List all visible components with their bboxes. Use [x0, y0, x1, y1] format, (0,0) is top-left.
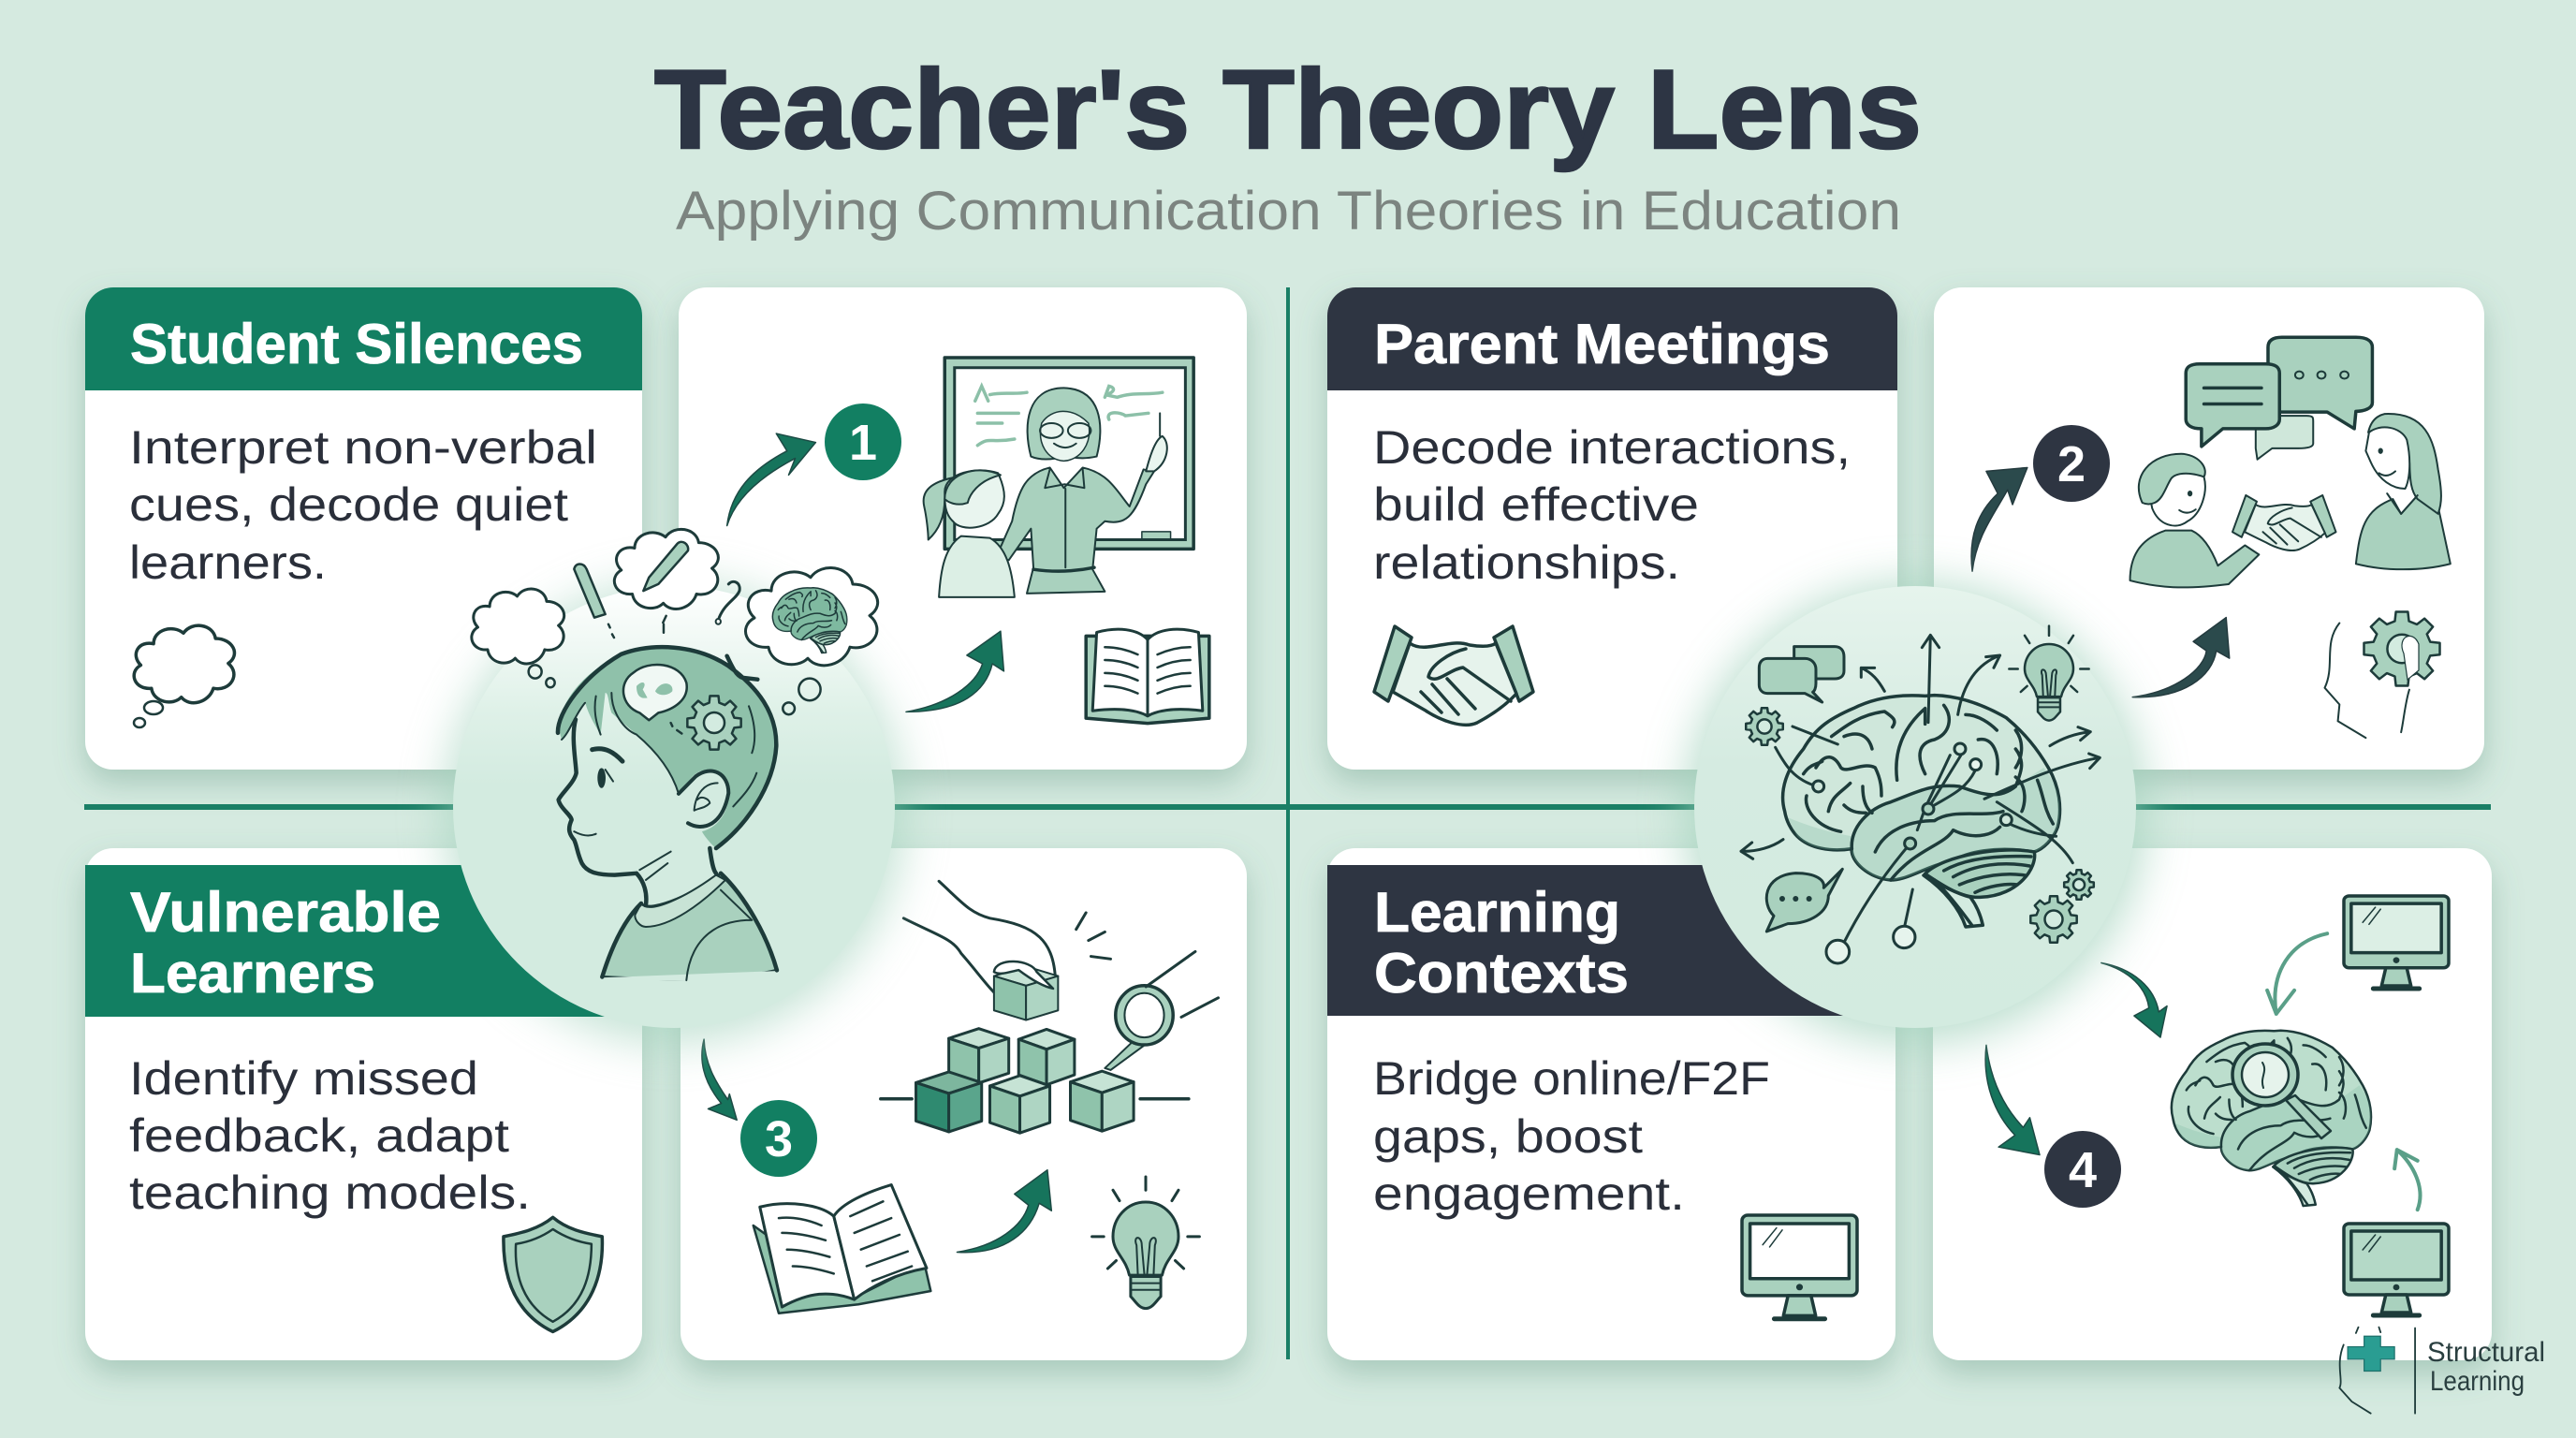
icon: shield	[504, 1217, 602, 1331]
icon: open book	[754, 1185, 930, 1313]
subtitle: Applying Communication Theories in Education	[676, 181, 1901, 242]
gear on hair	[687, 696, 741, 750]
central brain	[1783, 696, 2060, 927]
arrow up right lower	[2132, 618, 2230, 697]
text: student silences body: cues, decode quiet	[129, 478, 568, 531]
badge 4	[2044, 1131, 2121, 1208]
illustration: hand placing block on cubes	[881, 881, 1218, 1133]
header: learning contexts: Contexts	[1374, 942, 1629, 1005]
boy portrait	[529, 542, 821, 980]
text: vulnerable learners body: teaching models.	[129, 1167, 531, 1219]
panel: blocks illustration card	[681, 848, 1247, 1360]
badge 1: 1	[849, 415, 877, 471]
arrow to badge 1	[727, 433, 815, 526]
text: parent meetings body: Decode interactions,	[1373, 421, 1851, 474]
header: vulnerable learners: Vulnerable	[130, 881, 441, 944]
vertical divider	[1286, 287, 1290, 1359]
icon: handshake	[1374, 626, 1533, 725]
arrow to badge 2	[1971, 467, 2027, 571]
badge 3	[740, 1100, 817, 1177]
badge 1	[825, 404, 901, 480]
thin arrow up	[2394, 1150, 2420, 1210]
header: learning contexts	[1327, 865, 1895, 1016]
illustration: boy head with thoughts	[444, 529, 904, 1043]
gears and bulb	[1746, 626, 2094, 943]
badge 3: 3	[765, 1111, 793, 1167]
panel: learning contexts text card	[1327, 848, 1895, 1360]
header: parent meetings: Parent Meetings	[1374, 313, 1830, 375]
illustration: teacher and student at board	[924, 358, 1193, 597]
panel: parent meetings text card	[1327, 287, 1897, 770]
text: learning contexts body: Bridge online/F2F	[1373, 1052, 1770, 1105]
header: vulnerable learners	[85, 865, 642, 1017]
header: student silences: Student Silences	[130, 313, 583, 375]
text: student silences body	[129, 421, 597, 589]
text: vulnerable learners body: Identify missed	[129, 1052, 478, 1105]
connections, arrows and icons around brain	[1741, 635, 2100, 963]
panel: classroom illustration card	[679, 287, 1247, 770]
icon: monitor top	[2344, 896, 2449, 989]
icon: thought cloud	[134, 625, 234, 727]
logo: Structural Learning: Structural	[2427, 1337, 2545, 1368]
illustration: boy, woman, speech bubbles and handshake	[2130, 337, 2451, 587]
icon: light bulb	[1092, 1177, 1199, 1309]
horizontal divider	[84, 804, 2491, 810]
logo: Structural Learning: Learning	[2430, 1366, 2525, 1397]
logo: Structural Learning	[2339, 1328, 2545, 1414]
header: parent meetings	[1327, 287, 1897, 390]
header: student silences	[85, 287, 642, 390]
text: parent meetings body: build effective	[1373, 478, 1699, 531]
arrow to badge 4	[1985, 1045, 2040, 1155]
icon: open book	[1086, 629, 1209, 724]
text: student silences body: learners.	[129, 536, 327, 589]
text: learning contexts body: engagement.	[1373, 1167, 1685, 1220]
arrow to badge 3	[702, 1039, 737, 1120]
arrow into brain	[2101, 963, 2167, 1037]
panel: vulnerable learners text card	[85, 848, 642, 1360]
text: parent meetings body: relationships.	[1373, 536, 1680, 589]
icon: head with gear	[2325, 611, 2440, 738]
text: learning contexts body: gaps, boost	[1373, 1110, 1643, 1163]
text: vulnerable learners body	[129, 1052, 531, 1219]
badge 2	[2033, 425, 2110, 502]
icon: monitor bottom	[2344, 1224, 2449, 1315]
icon: brain with magnifier	[2172, 1031, 2371, 1206]
badge 4: 4	[2069, 1142, 2097, 1198]
text: student silences body: Interpret non-verbal	[129, 421, 597, 474]
thought clouds	[472, 529, 878, 666]
header: vulnerable learners: Learners	[130, 942, 375, 1005]
arrow up right lower	[957, 1170, 1051, 1253]
header: learning contexts: Learning	[1374, 881, 1620, 944]
icon: monitor	[1742, 1215, 1857, 1319]
badge 2: 2	[2057, 436, 2086, 492]
text: vulnerable learners body: feedback, adapt	[129, 1109, 509, 1162]
panel: student silences text card	[85, 287, 642, 770]
title: Teacher's Theory Lens	[654, 47, 1922, 172]
text: learning contexts body	[1373, 1052, 1770, 1220]
text: parent meetings body	[1373, 421, 1851, 589]
panel: brain analysis illustration card	[1933, 848, 2492, 1360]
illustration: brain with radiating ideas	[1685, 582, 2145, 1043]
panel: parent meeting illustration card	[1934, 287, 2484, 770]
thin arrow down	[2267, 933, 2327, 1014]
arrow up right lower	[906, 631, 1003, 712]
